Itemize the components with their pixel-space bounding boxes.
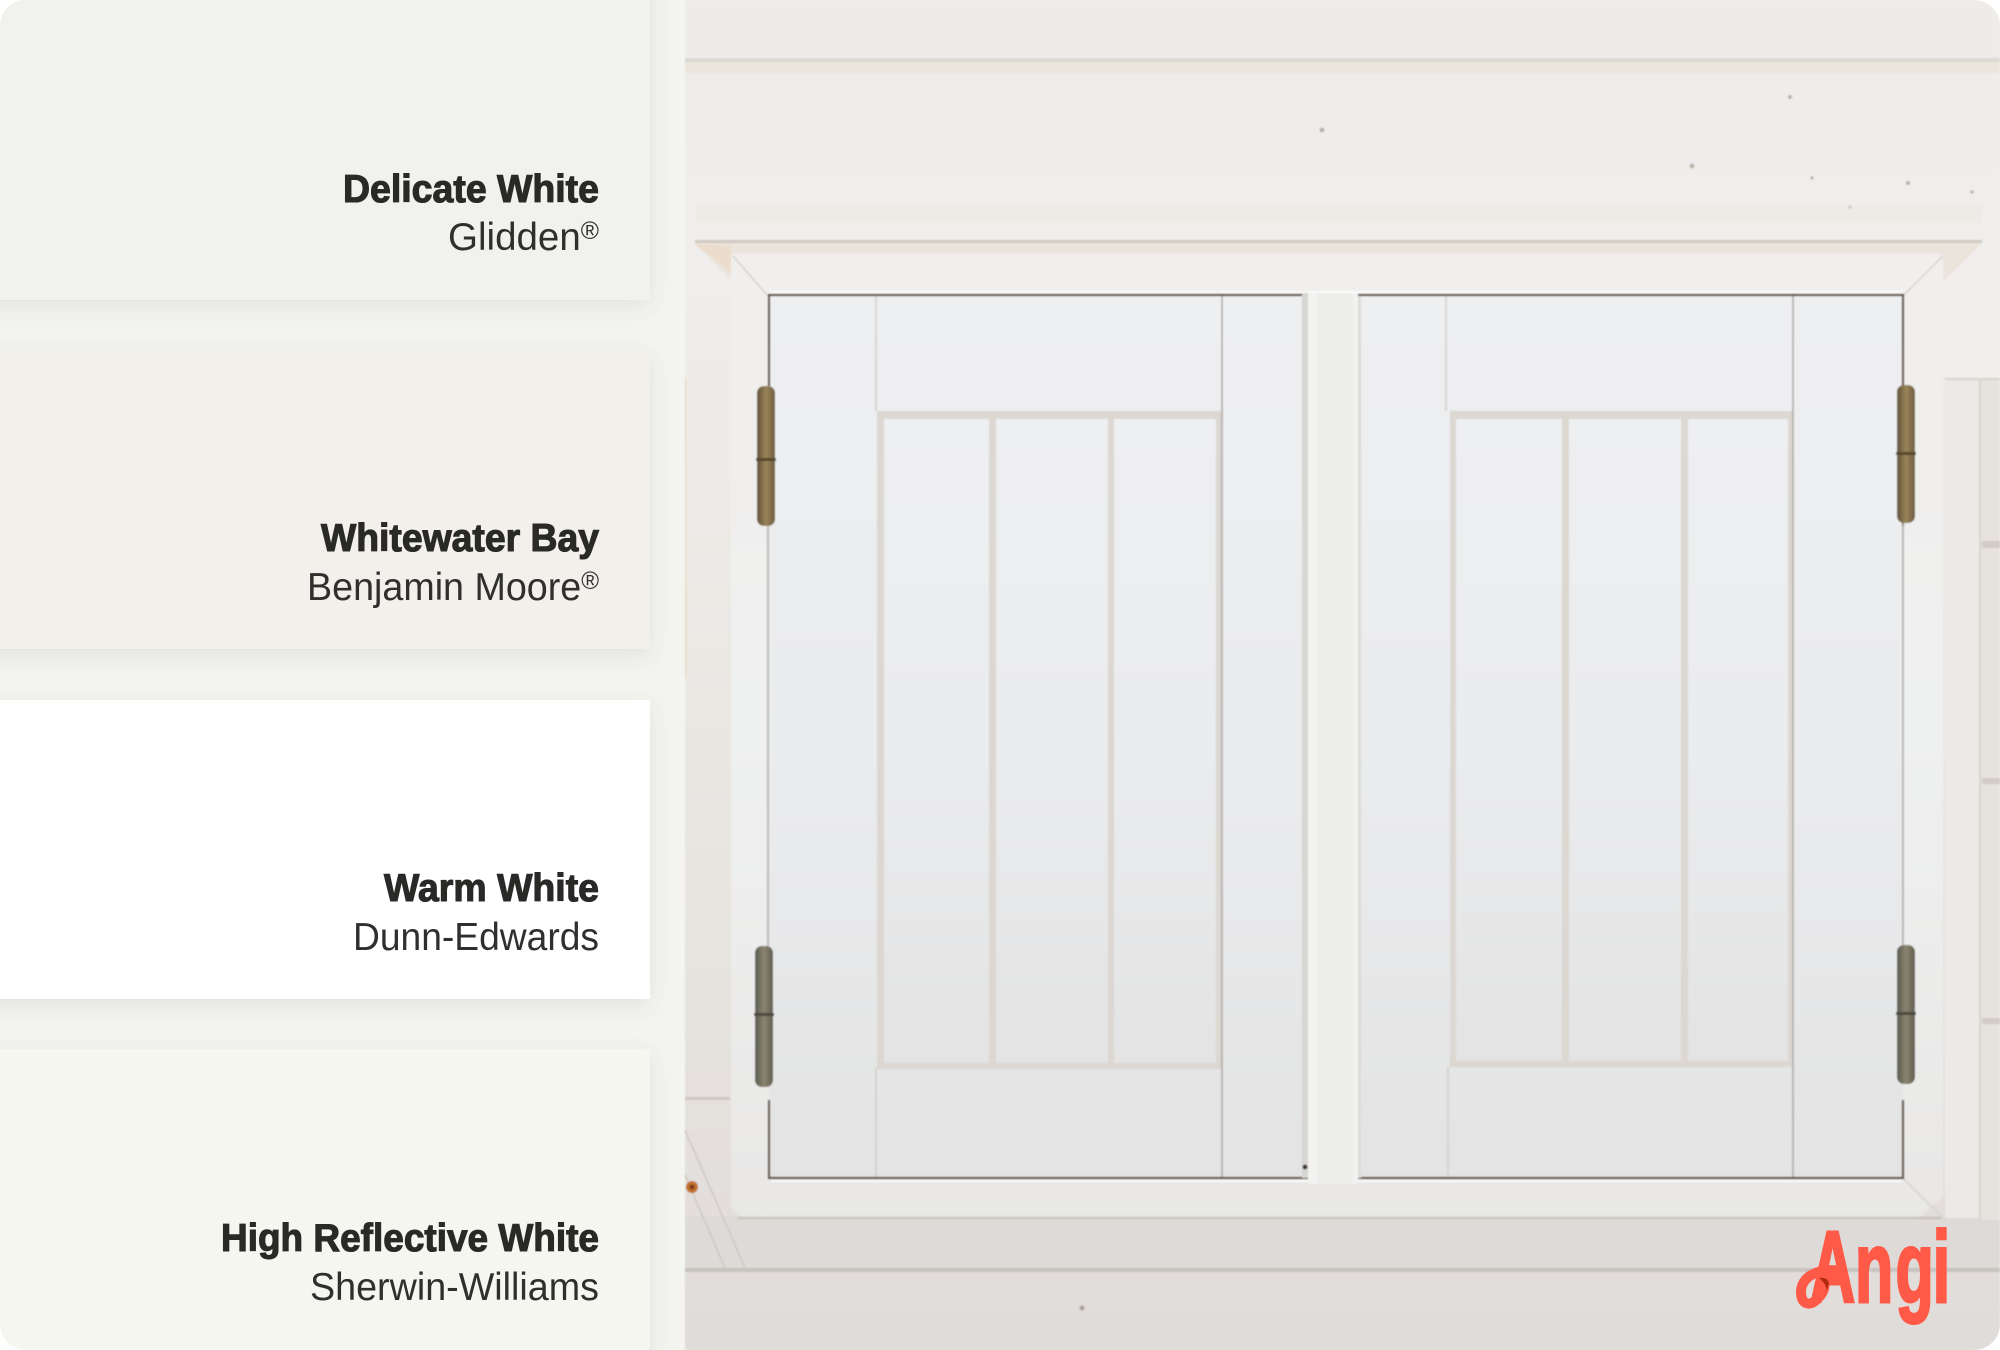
page background <box>0 0 686 1350</box>
color name: High Reflective White <box>221 1217 599 1260</box>
lower wall band <box>685 1216 2000 1268</box>
wall background <box>685 0 2000 1350</box>
color name: Whitewater Bay <box>321 517 599 560</box>
hinge: left top <box>756 386 776 526</box>
right door <box>1444 295 1795 1178</box>
brand: Glidden <box>448 216 582 259</box>
highlight along door opening <box>769 292 1903 1181</box>
left door <box>874 295 1224 1178</box>
hinge: left bottom <box>754 946 774 1087</box>
right wall trim <box>1944 378 2000 1218</box>
photo: white painted cabinet doors <box>685 0 2000 1350</box>
left door recessed panel <box>877 411 1222 1069</box>
center mullion <box>1302 293 1361 1184</box>
color name: Warm White <box>384 867 599 910</box>
upper wall board seam <box>685 58 2000 73</box>
brand: Dunn-Edwards <box>353 916 599 959</box>
brand: Sherwin-Williams <box>310 1266 599 1309</box>
right door recessed panel <box>1450 411 1793 1067</box>
brand: Benjamin Moore <box>307 566 591 609</box>
wall specks <box>1320 95 1974 209</box>
hinge: right top <box>1896 385 1916 523</box>
frame mitre corners <box>733 256 1943 1215</box>
brand: ® <box>581 217 600 245</box>
swatch card: Whitewater Bay <box>0 351 650 649</box>
frame shadow line <box>738 1217 1942 1219</box>
right door boards <box>1456 419 1788 1061</box>
left wall details <box>685 378 745 1268</box>
lower wall speck <box>1080 1306 1084 1310</box>
swatch card: High Reflective White <box>222 1066 652 1350</box>
cornice <box>695 205 1982 282</box>
lower wall board seam <box>685 1268 2000 1272</box>
left door boards <box>884 419 1216 1063</box>
door side gaps <box>768 523 1903 946</box>
color name: Delicate White <box>343 168 599 211</box>
swatch card: Delicate White <box>0 0 650 300</box>
swatch card: Warm White <box>0 700 650 999</box>
hinge: right bottom <box>1896 945 1916 1084</box>
logo: Angi: Angi <box>1810 1211 1950 1324</box>
brand: ® <box>581 567 600 595</box>
door opening outline <box>769 295 1903 1178</box>
cabinet frame <box>731 254 1943 1217</box>
